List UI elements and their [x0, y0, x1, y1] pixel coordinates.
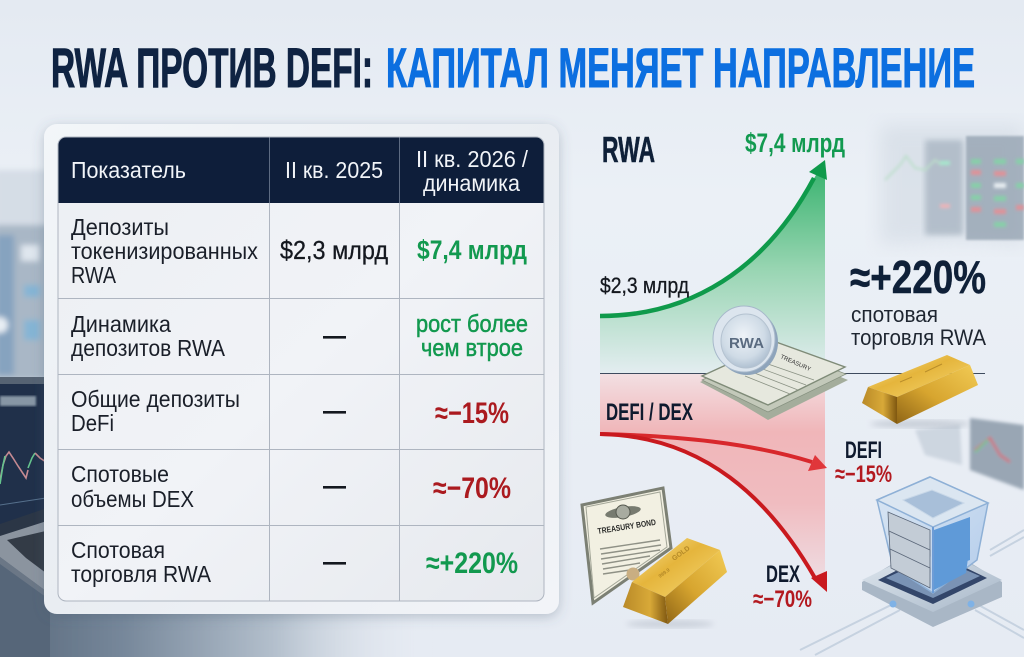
callout: +220% spot trading: [850, 251, 986, 350]
row: RWA dynamics: депозитов RWA: [71, 335, 226, 361]
row: DeFi deposits: Общие депозиты: [71, 386, 240, 412]
table body: [58, 137, 544, 601]
row: tokenized deposits: RWA: [71, 262, 117, 288]
row: RWA dynamics: Динамика: [71, 311, 171, 337]
row: RWA spot trading: Спотовая: [71, 537, 165, 563]
icon: treasury bond: TREASURY BOND: [597, 517, 657, 536]
chart: DeFi / DEX decline: [600, 373, 827, 592]
background: blurred trading screens top right: [880, 125, 1024, 245]
table header: динамика: [423, 170, 520, 196]
row: RWA spot trading: ≈+220%: [426, 547, 518, 580]
icon: gold bar left: GOLD: [671, 545, 692, 563]
label: DEX -70%: [753, 561, 812, 613]
label: DeFi -15%: ≈−15%: [835, 461, 892, 488]
title: [51, 36, 975, 99]
label: RWA: RWA: [602, 129, 655, 170]
row: DEX volumes: объемы DEX: [71, 486, 194, 512]
table header: Показатель: [71, 157, 186, 183]
icon: gold bar left: [623, 538, 727, 628]
label: DeFi -15%: [835, 437, 892, 488]
icon: server cube on platform: [800, 477, 1024, 655]
label: 7.4 billion: $7,4 млрд: [745, 128, 845, 158]
row: RWA dynamics: чем втрое: [421, 335, 523, 362]
label: DEX -70%: DEX: [766, 561, 800, 588]
table header: II кв. 2026 /: [416, 146, 529, 172]
row: DEX volumes: Спотовые: [71, 461, 169, 487]
icon: gold bar right: [862, 355, 978, 428]
callout: +220% spot trading: торговля RWA: [851, 325, 986, 350]
icon: RWA coin: [713, 306, 778, 375]
row: RWA spot trading: [71, 537, 518, 587]
row: tokenized deposits: токенизированных: [71, 238, 258, 264]
row: tokenized deposits: $7,4 млрд: [417, 235, 527, 265]
row: RWA spot trading: торговля RWA: [71, 561, 212, 587]
row: RWA dynamics: [71, 311, 528, 362]
icon: treasury bond: [582, 488, 671, 603]
title: RWA ПРОТИВ DEFI:: [51, 36, 373, 99]
label: DEX -70%: ≈−70%: [753, 586, 812, 613]
background: blurred data center left: [0, 170, 60, 380]
row: tokenized deposits: Депозиты: [71, 214, 169, 240]
row: DeFi deposits: ≈−15%: [435, 397, 509, 430]
chart: RWA growth: [600, 160, 827, 373]
row: DEX volumes: ≈−70%: [433, 472, 511, 505]
row: tokenized deposits: [71, 214, 527, 288]
row: tokenized deposits: $2,3 млрд: [280, 235, 388, 265]
background: laptop with chart: [0, 377, 50, 657]
table header: [71, 146, 529, 196]
callout: +220% spot trading: спотовая: [851, 302, 938, 327]
label: DeFi -15%: DEFI: [845, 437, 882, 464]
background: blurred screens lower right: [915, 418, 1024, 490]
icon: treasury notes: [700, 342, 848, 420]
panel: table card: [44, 124, 559, 614]
row: DeFi deposits: DeFi: [71, 410, 114, 436]
callout: +220% spot trading: ≈+220%: [850, 251, 986, 303]
icon: treasury notes: TREASURY: [779, 354, 811, 373]
label: 2.3 billion: $2,3 млрд: [600, 273, 689, 298]
row: RWA dynamics: рост более: [416, 311, 528, 338]
icon: RWA coin: RWA: [729, 335, 764, 352]
row: DEX volumes: [71, 461, 511, 512]
icon: gold bar left: 999.9: [658, 567, 671, 580]
label: DeFi / DEX: DEFI / DEX: [606, 399, 693, 426]
row: DeFi deposits: [71, 386, 509, 436]
table header: II кв. 2025: [285, 157, 383, 183]
divider line: [600, 372, 985, 374]
